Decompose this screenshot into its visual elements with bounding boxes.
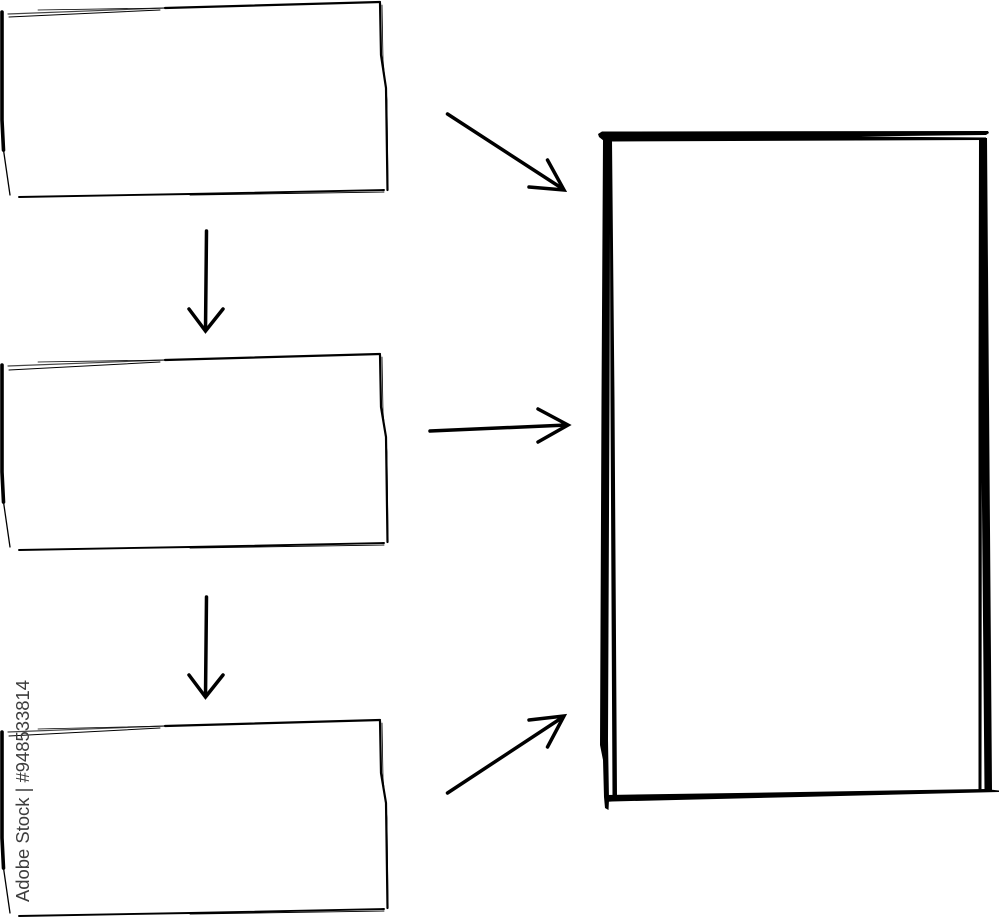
right edge: [978, 138, 992, 790]
source label: Adobe Stock | #948533814: [13, 680, 33, 902]
bottom edge: [605, 789, 999, 802]
arrow: top box to large box: [448, 114, 564, 190]
panel: top left box: [2, 2, 388, 197]
left edge: [600, 140, 617, 810]
arrow: middle box to bottom box: [189, 597, 223, 697]
arrow: middle box to large box: [430, 409, 568, 442]
arrow: top box to middle box: [189, 231, 223, 331]
top edge: [598, 131, 989, 142]
arrow: bottom box to large box: [448, 716, 564, 793]
panel: bottom left box: [2, 720, 388, 916]
panel: middle left box: [2, 354, 388, 550]
panel: large right box: [598, 131, 999, 810]
